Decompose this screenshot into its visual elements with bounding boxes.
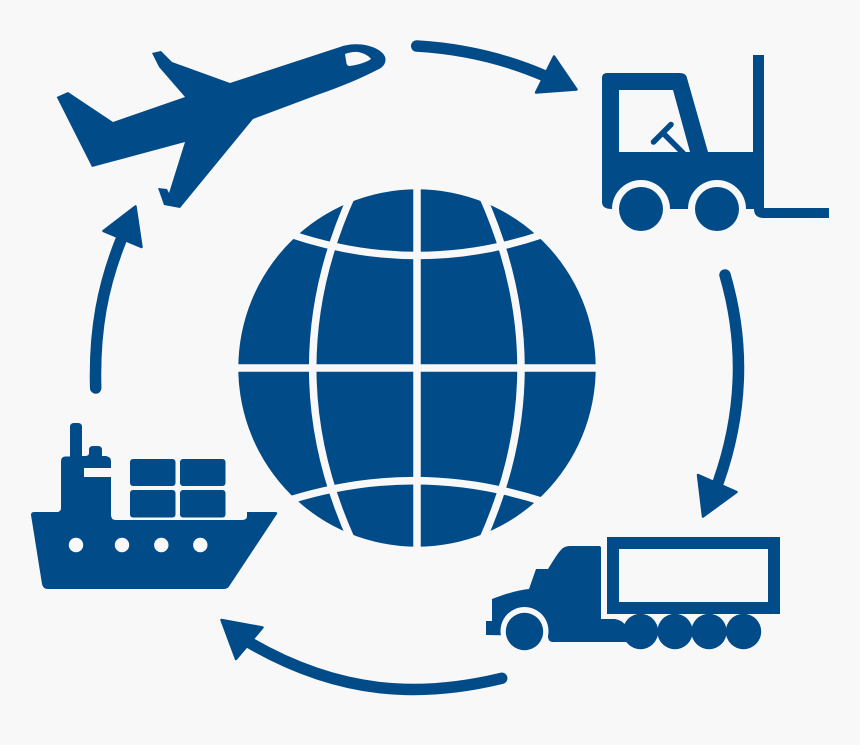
truck cab	[486, 546, 626, 642]
front wheel	[619, 187, 663, 231]
arrow: forklift to truck	[698, 275, 738, 516]
icon: forklift	[602, 55, 829, 238]
arrow: truck to ship	[222, 620, 502, 690]
airplane body	[57, 44, 385, 208]
globe grid lines	[230, 180, 604, 556]
wheel arches	[612, 180, 670, 238]
arrow head	[222, 620, 262, 659]
icon: container ship	[31, 423, 277, 589]
arrow shaft	[95, 240, 121, 388]
steering wheel	[654, 124, 683, 153]
trailer wheels	[623, 614, 761, 649]
forklift body and mast	[602, 55, 829, 218]
arrow shaft	[417, 46, 545, 76]
arrow head	[104, 206, 142, 247]
rear wheel	[695, 187, 739, 231]
arrow shaft	[718, 275, 738, 482]
arrow: ship to airplane	[95, 206, 142, 388]
arrow: airplane to forklift	[417, 46, 576, 92]
globe sphere	[238, 189, 596, 547]
portholes	[69, 538, 208, 552]
icon: truck	[486, 537, 780, 655]
wheel arch	[500, 607, 548, 655]
arrow head	[698, 475, 736, 516]
arrow shaft	[250, 643, 502, 690]
icon: globe	[230, 180, 604, 556]
icon: airplane	[57, 44, 385, 208]
ship hull and superstructure	[31, 423, 277, 589]
cab wheel	[506, 613, 543, 650]
truck trailer	[607, 537, 780, 614]
arrow head	[536, 56, 576, 92]
containers	[130, 459, 226, 518]
